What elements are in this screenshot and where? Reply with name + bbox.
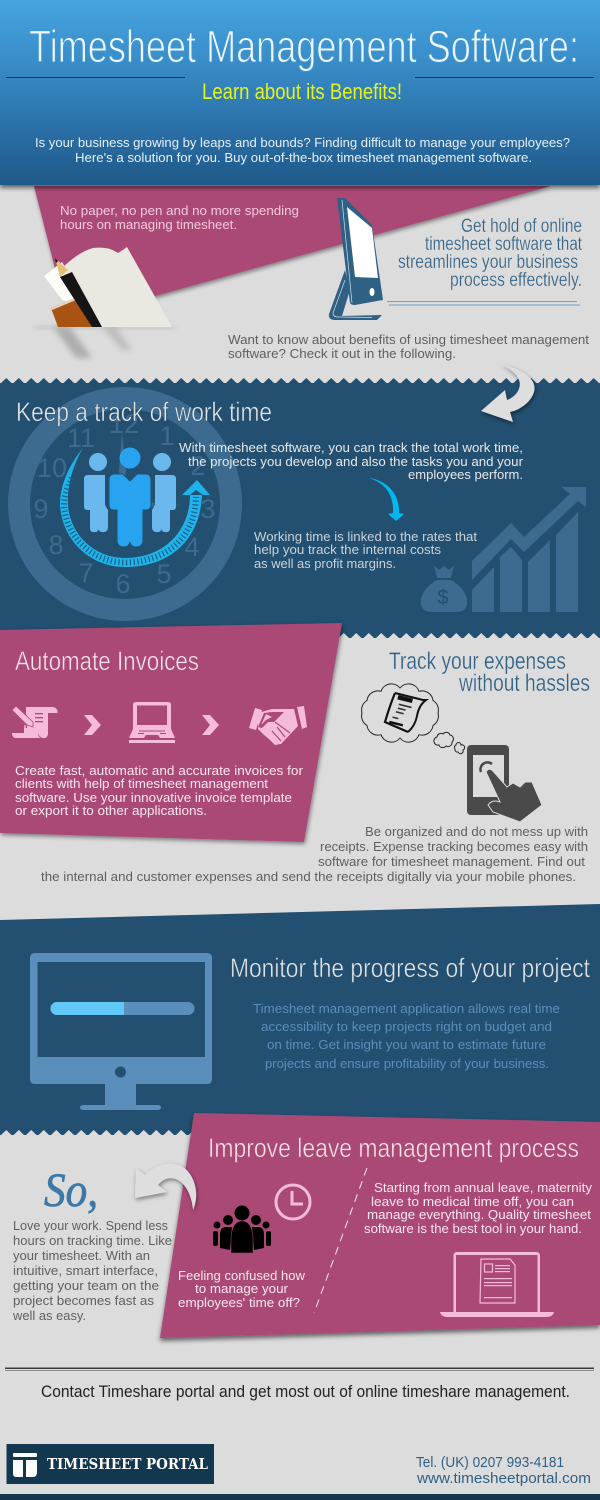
text: want to know: software? Check it out in the following.	[228, 346, 456, 361]
text: no paper: hours on managing timesheet.	[60, 217, 237, 232]
text: create fast: or export it to other applications.	[15, 803, 207, 818]
text: be organized: Be organized and do not mess up with	[365, 824, 588, 839]
logo: timesheet portal	[6, 1444, 214, 1484]
text: love your work: your timesheet. With an	[13, 1248, 150, 1263]
text: get hold of online software	[398, 216, 583, 291]
double rule	[387, 301, 580, 306]
icon: clock: 10	[37, 453, 67, 483]
title rule left	[6, 77, 185, 78]
icon: paper pencil and book	[35, 247, 175, 358]
panel: header banner	[0, 0, 600, 185]
text: starting from annual leave: leave to medical time off, you can	[371, 1194, 574, 1209]
icon: clock: 2	[190, 451, 206, 481]
dashed divider	[314, 1168, 367, 1313]
icon: circular hatched arrow	[60, 448, 210, 567]
icon: clock: 1	[159, 421, 175, 451]
icon: money bag	[421, 565, 467, 612]
icon: clock: 4	[184, 532, 200, 562]
icon: monitor with progress bar	[30, 953, 212, 1110]
text: love your work: hours on tracking time. Like	[13, 1233, 172, 1248]
text: feeling confused	[178, 1268, 306, 1310]
panel: monitor the progress	[0, 904, 600, 1140]
arrow: white curved back	[135, 1164, 196, 1210]
text: feeling confused: Feeling confused how	[178, 1268, 306, 1283]
text: starting from annual leave: software is the best tool in your hand.	[364, 1221, 582, 1236]
subtitle: Learn about its Benefits!	[202, 79, 402, 104]
text: working time: as well as profit margins.	[254, 556, 396, 571]
icon: thought cloud with receipt	[362, 684, 465, 754]
heading: Automate Invoices	[15, 646, 199, 676]
icon: clock	[19, 398, 231, 610]
heading: Keep a track of work time	[16, 397, 272, 427]
text: timesheet application: on time. Get insight you want to estimate future	[267, 1037, 546, 1052]
icon: clock: 5	[156, 559, 172, 589]
text: working time: help you track the internal costs	[254, 542, 442, 557]
text: love your work: project becomes fast as	[13, 1293, 155, 1308]
text: telephone and website: Tel. (UK) 0207 993-4181	[416, 1454, 564, 1471]
text: want to know	[228, 332, 589, 361]
panel: keep a track of work time	[0, 363, 600, 639]
chart: rising bars with arrow	[472, 487, 586, 612]
icon: clock: 3	[200, 494, 216, 524]
footer bar	[0, 1494, 600, 1500]
text: no paper: No paper, no pen and no more spending	[60, 203, 299, 218]
text: timesheet application: projects and ensure profitability of your business.	[265, 1056, 549, 1071]
text: create fast: software. Use your innovative invoice template	[15, 790, 292, 805]
text: working time	[254, 529, 477, 571]
title rule right	[415, 77, 594, 78]
text: feeling confused: to manage your	[195, 1281, 289, 1296]
icon: clock: 11	[67, 423, 95, 453]
text: feeling confused: employees' time off?	[178, 1295, 300, 1310]
arrow: big white curved	[481, 363, 535, 422]
text: telephone and website: www.timesheetportal.com	[416, 1470, 591, 1487]
double rule above contact	[5, 1368, 594, 1371]
text: with timesheet software: employees perform.	[408, 467, 523, 482]
text: starting from annual leave	[364, 1180, 593, 1236]
text: starting from annual leave: manage everything. Quality timesheet	[367, 1207, 591, 1222]
text: be organized: the internal and customer expenses and send the receipts digitally via your mobile phones.	[41, 869, 576, 884]
icon: clock: 9	[33, 494, 49, 524]
icon: logo mark	[13, 1453, 37, 1477]
heading: track your expenses	[389, 648, 590, 697]
icon: team of three	[84, 448, 176, 547]
text: starting from annual leave: Starting from annual leave, maternity	[374, 1180, 593, 1195]
text: create fast: clients with help of timesheet management	[15, 776, 268, 791]
icon: group of people	[213, 1206, 271, 1253]
icon: laptop with document	[440, 1252, 554, 1317]
text: timesheet application: Timesheet management application allows real time	[253, 1001, 560, 1016]
text: no paper	[60, 203, 299, 232]
panel: paper-free magenta triangle	[34, 186, 551, 296]
panel: automate invoices	[0, 623, 342, 842]
intro text	[35, 135, 570, 165]
icon: chevron one	[84, 715, 101, 735]
logo wordmark: TIMESHEET PORTAL	[47, 1455, 208, 1473]
icon: money bag: $	[437, 587, 449, 609]
text: be organized: software for timesheet management. Find out	[318, 854, 585, 869]
text: love your work: Love your work. Spend less	[13, 1218, 168, 1233]
text: timesheet application	[253, 1001, 560, 1071]
intro text: Here's a solution for you. Buy out-of-the-box timesheet management software.	[75, 150, 532, 165]
icon: contract scroll and pen	[12, 706, 58, 738]
icon: clock: 7	[78, 558, 94, 588]
text: love your work: intuitive, smart interface,	[13, 1263, 158, 1278]
text: with timesheet software	[179, 440, 524, 482]
icon: desktop monitor	[329, 198, 383, 320]
text: with timesheet software: the projects you develop and also the tasks you and your	[188, 454, 524, 469]
icon: laptop	[129, 702, 175, 743]
text: telephone and website	[416, 1454, 591, 1487]
text: love your work: getting your team on the	[13, 1278, 159, 1293]
icon: clock: 12	[109, 409, 139, 439]
text: timesheet application: accessibility to keep projects right on budget and	[261, 1019, 552, 1034]
icon: clock: 8	[48, 530, 64, 560]
text: want to know: Want to know about benefits of using timesheet management	[228, 332, 589, 347]
text: love your work	[12, 1218, 172, 1323]
text: create fast	[15, 763, 304, 818]
intro text: Is your business growing by leaps and bounds? Finding difficult to manage your employees?	[35, 135, 570, 150]
text: with timesheet software: With timesheet software, you can track the total work time,	[179, 440, 523, 455]
text: love your work: well as easy.	[12, 1308, 86, 1323]
text: be organized	[41, 824, 588, 884]
text: be organized: receipts. Expense tracking becomes easy with	[320, 839, 588, 854]
icon: handshake	[249, 706, 307, 745]
text: So,: So,	[44, 1164, 98, 1217]
arrow: cyan down	[368, 478, 404, 521]
icon: chevron two	[202, 715, 219, 735]
text: create fast: Create fast, automatic and accurate invoices for	[15, 763, 304, 778]
icon: phone and pointing hand	[467, 745, 542, 822]
text: working time: Working time is linked to the rates that	[254, 529, 477, 544]
panel: improve leave management	[160, 1113, 600, 1338]
icon: clock: 6	[115, 569, 131, 599]
icon: clock	[276, 1185, 310, 1219]
